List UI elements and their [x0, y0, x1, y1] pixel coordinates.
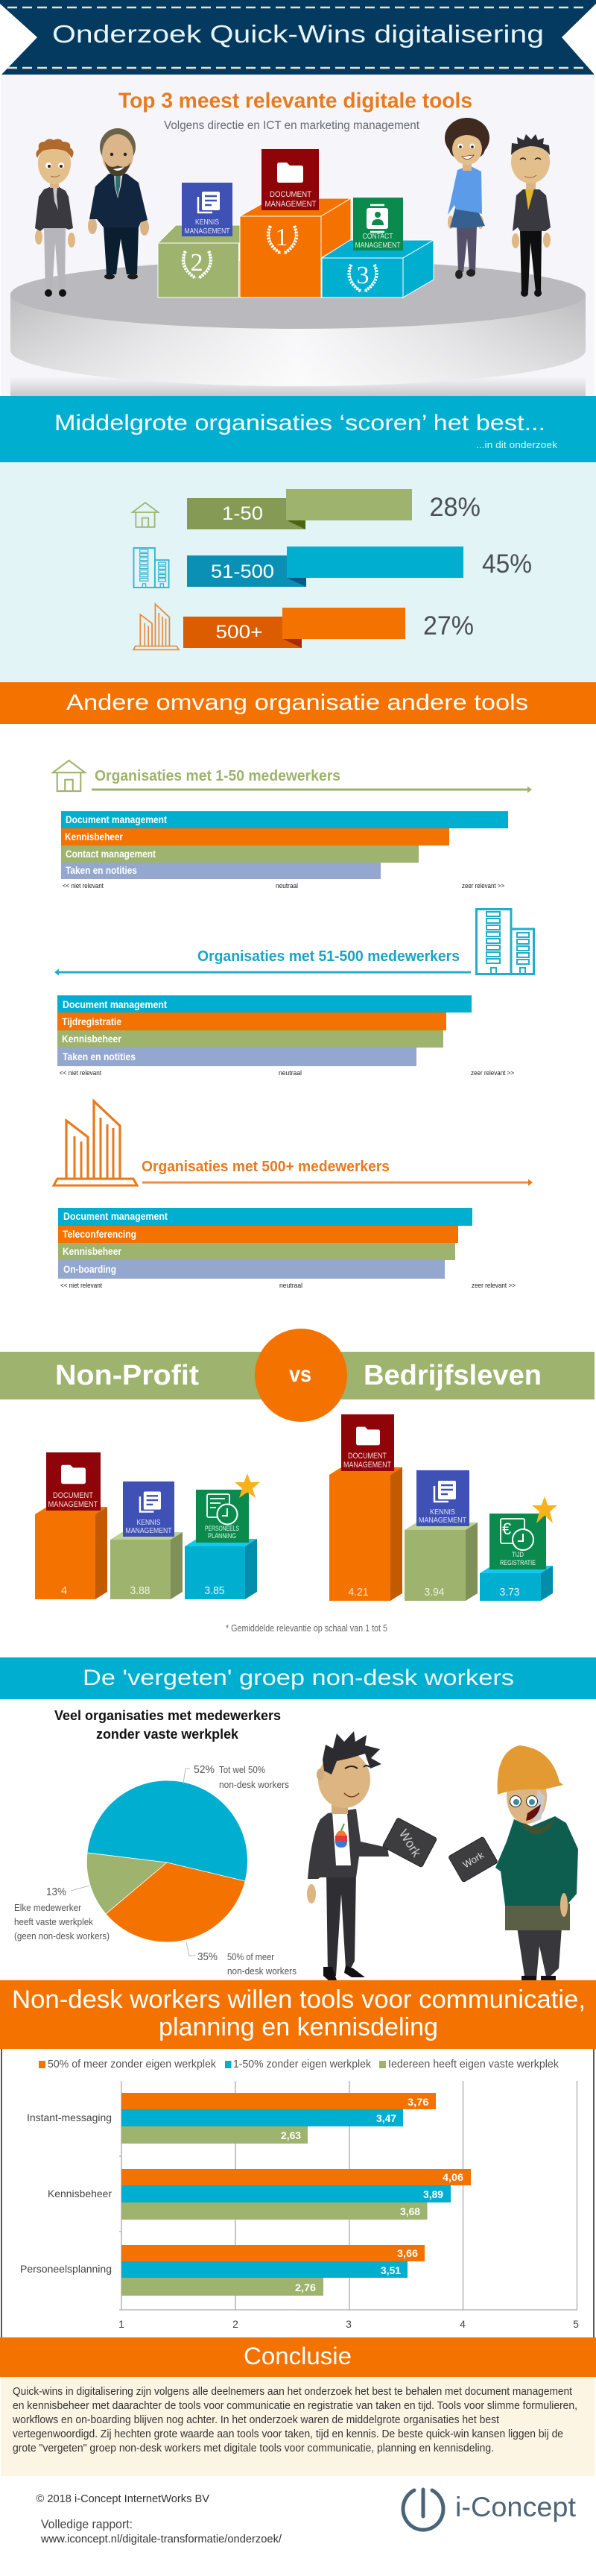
group: kennisbeheer: 4,06 [443, 2171, 463, 2183]
heading: top 3: Top 3 meest relevante digitale tools [118, 89, 472, 113]
bar: document management 4.21: MANAGEMENT [343, 1461, 391, 1470]
label: 52%: Tot wel 50% [219, 1765, 265, 1775]
person: worker with helmet [448, 1745, 578, 1980]
bar: document management 4.21: 4.21 [349, 1586, 368, 1599]
header: non-profit vs bedrijfsleven: vs [289, 1362, 311, 1387]
icon: offices [477, 910, 533, 974]
group: personeelsplanning: 2,76 [295, 2281, 316, 2293]
chart: bedrijfsleven [329, 1414, 557, 1601]
ribbon: 500+ [183, 608, 405, 648]
section: 51-500 medewerkers [54, 910, 533, 1077]
header: vergeten groep: De 'vergeten' groep non-desk workers [83, 1666, 514, 1690]
ribbon: 1-50: 1-50 [222, 503, 263, 524]
legend [39, 2059, 559, 2070]
platform [10, 260, 586, 396]
bar chart: non-desk workers [1, 2049, 594, 2337]
group: kennisbeheer: 3,68 [400, 2205, 420, 2217]
icon: house [53, 760, 85, 791]
bar chart: Taken en notities [66, 864, 137, 876]
group: kennisbeheer: Kennisbeheer [48, 2188, 112, 2199]
group: personeelsplanning [20, 2245, 425, 2296]
panel: conclusie text: Quick-wins in digitalisering zijn volgens alle deelnemers aan het onderzoek het best te behalen met document management [13, 2386, 572, 2398]
bar: kennis management 3.94: MANAGEMENT [419, 1517, 466, 1525]
header: non-desk workers tools: planning en kennisdeling [159, 2013, 438, 2041]
logo: i-Concept: i-Concept [455, 2492, 577, 2522]
person: dark hair man [511, 134, 551, 297]
bar: kennis management 3.94 [405, 1470, 478, 1601]
icon: towers [133, 604, 179, 649]
logo: i-Concept [403, 2490, 577, 2530]
bar chart: Teleconferencing [63, 1228, 136, 1240]
label: 52% [183, 1763, 289, 1790]
header: non-profit vs bedrijfsleven: Non-Profit [55, 1360, 199, 1391]
group: kennisbeheer [48, 2169, 471, 2220]
header: andere omvang [0, 682, 596, 724]
value: 45%: 45% [482, 549, 532, 579]
subheading: Volgens directie en ICT en marketing management [164, 119, 420, 132]
podium [158, 198, 434, 297]
card: contact management: CONTACT [362, 233, 393, 241]
footer: report link [40, 2517, 282, 2545]
bar chart [61, 811, 508, 890]
header: vergeten groep [0, 1657, 596, 1699]
card: contact management: MANAGEMENT [355, 242, 401, 250]
card: document management: DOCUMENT [270, 190, 311, 199]
card: kennis management: KENNIS [195, 218, 219, 227]
card: document management [261, 149, 319, 210]
axis labels: 4 [460, 2318, 466, 2330]
panel: conclusie text [1, 2377, 595, 2476]
chart: non-profit [35, 1452, 260, 1599]
group: personeelsplanning: Personeelsplanning [20, 2263, 112, 2275]
bar chart [58, 1208, 516, 1290]
panel: top 3 tools [1, 75, 595, 396]
panel: size ribbons [0, 462, 596, 682]
bar: tijd registratie 3.73: 3.73 [499, 1586, 520, 1599]
section: 1-50 medewerkers [53, 760, 532, 890]
label: 13%: heeft vaste werkplek [14, 1917, 94, 1927]
label: 52%: non-desk workers [219, 1780, 289, 1790]
panel: conclusie text: en kennisbeheer met daarachter de tools voor communicatie en registratie van taken en tijd. Tools voor slimme formulieren, [13, 2400, 577, 2412]
legend: 1-50% zonder eigen werkplek [233, 2059, 372, 2070]
group: instant-messaging [27, 2093, 436, 2144]
header: conclusie [0, 2337, 596, 2377]
panel: conclusie text: workflows en on-boarding blijven nog achter. In het onderzoek waren de middelgrote organisaties het best [12, 2414, 499, 2426]
footer: report link: www.iconcept.nl/digitale-transformatie/onderzoek/ [40, 2533, 282, 2545]
bar chart: zeer relevant >> [472, 1282, 516, 1290]
heading: Organisaties met 51-500 medewerkers [197, 948, 460, 965]
title: Onderzoek Quick-Wins digitalisering [52, 20, 544, 48]
axis labels: 5 [573, 2318, 579, 2330]
group: personeelsplanning: 3,51 [381, 2264, 401, 2276]
label: 13%: Elke medewerker [14, 1903, 81, 1913]
bar: kennis management 3.88: MANAGEMENT [125, 1527, 171, 1535]
value: 28%: 28% [429, 493, 481, 522]
card: kennis management [182, 183, 232, 236]
pie chart heading: zonder vaste werkplek [96, 1727, 239, 1742]
icon: house [133, 503, 158, 527]
bar chart [57, 995, 514, 1077]
bar: kennis management 3.88 [110, 1481, 183, 1599]
header: middelgrote organisaties: Middelgrote organisaties ‘scoren’ het best... [54, 411, 545, 435]
label: 35% [186, 1942, 297, 1977]
person: bearded man [88, 128, 149, 279]
bar chart: << niet relevant [63, 882, 104, 890]
bar chart: Kennisbeheer [63, 1245, 121, 1257]
bar: kennis management 3.88: KENNIS [137, 1519, 161, 1527]
group: instant-messaging: Instant-messaging [27, 2111, 112, 2123]
bar: kennis management 3.94: 3.94 [425, 1586, 444, 1599]
bar: personeels planning 3.85 [185, 1473, 260, 1599]
header: conclusie: Conclusie [244, 2343, 352, 2369]
icon: tablet [448, 1836, 498, 1883]
bar: document management 4.21: DOCUMENT [348, 1452, 387, 1461]
ribbon: 1-50 [187, 489, 412, 529]
bar: tijd registratie 3.73: € [502, 1520, 511, 1538]
value: 27%: 27% [423, 611, 474, 640]
icon: offices [133, 548, 169, 588]
title banner [0, 0, 596, 75]
bar chart: Document management [63, 998, 167, 1010]
axis labels: 3 [346, 2318, 352, 2330]
bar: kennis management 3.94: KENNIS [430, 1508, 455, 1517]
label: 35%: non-desk workers [227, 1966, 297, 1977]
bar chart: Contact management [66, 848, 156, 860]
pie chart heading: Veel organisaties met medewerkers [54, 1708, 281, 1723]
person: man with tablet [307, 1731, 437, 1981]
label: 13%: 13% [46, 1886, 66, 1898]
bar: tijd registratie 3.73 [480, 1496, 557, 1601]
bar: document management 4 [35, 1452, 107, 1599]
axis labels [118, 2318, 579, 2330]
header: andere omvang: Andere omvang organisatie andere tools [66, 690, 528, 715]
icon: tablet [382, 1818, 437, 1868]
label: 13% [14, 1886, 110, 1942]
bar chart: On-boarding [63, 1263, 116, 1275]
group: instant-messaging: 3,47 [376, 2112, 396, 2124]
pie chart [14, 1763, 297, 1977]
bar chart: << niet relevant [60, 1069, 101, 1077]
bar chart: Tijdregistratie [62, 1015, 121, 1027]
group: instant-messaging: 3,76 [408, 2096, 429, 2108]
label: 35%: 35% [197, 1950, 218, 1963]
group: instant-messaging: 2,63 [281, 2129, 301, 2141]
group: personeelsplanning: 3,66 [397, 2247, 418, 2259]
footer: copyright: © 2018 i-Concept InternetWorks BV [36, 2492, 209, 2505]
label: 13%: (geen non-desk workers) [14, 1931, 110, 1942]
label: 52%: 52% [194, 1763, 215, 1776]
ribbon: 51-500: 51-500 [211, 561, 274, 582]
header: non-desk workers tools [0, 1980, 596, 2049]
bar: tijd registratie 3.73: TIJD [512, 1551, 524, 1559]
panel: conclusie text: grote "vergeten" groep non-desk workers met digitale tools voor communicatie, planning en kennisdeling. [13, 2443, 494, 2454]
header: middelgrote organisaties: ...in dit onderzoek [476, 439, 558, 450]
bar chart: neutraal [276, 882, 298, 890]
icon: tablet: Work [460, 1849, 486, 1870]
header: non-desk workers tools: Non-desk workers willen tools voor communicatie, [12, 1985, 586, 2014]
bar: personeels planning 3.85: 3.85 [204, 1584, 225, 1597]
bar: kennis management 3.88: 3.88 [130, 1584, 150, 1597]
legend: 50% of meer zonder eigen werkplek [48, 2059, 217, 2070]
bar chart: Document management [63, 1210, 168, 1222]
bar chart: Document management [66, 813, 167, 825]
person: curly hair [35, 139, 75, 297]
bar: personeels planning 3.85: PERSONEELS [205, 1525, 239, 1533]
bar: document management 4: MANAGEMENT [48, 1500, 98, 1509]
footnote: * Gemiddelde relevantie op schaal van 1 tot 5 [226, 1622, 387, 1634]
bar: tijd registratie 3.73: REGISTRATIE [500, 1559, 536, 1567]
bar: document management 4: DOCUMENT [53, 1491, 93, 1500]
pie chart heading [54, 1708, 281, 1742]
axis labels: 1 [118, 2318, 124, 2330]
legend: Iedereen heeft eigen vaste werkplek [388, 2059, 559, 2070]
card: contact management [353, 198, 403, 251]
heading: Organisaties met 500+ medewerkers [142, 1159, 390, 1175]
bar: document management 4: 4 [61, 1584, 67, 1597]
bar chart: Kennisbeheer [65, 831, 123, 843]
bar chart: zeer relevant >> [462, 882, 504, 890]
bar chart: zeer relevant >> [471, 1069, 514, 1077]
section: 500+ medewerkers [54, 1101, 533, 1290]
header: middelgrote organisaties [0, 396, 596, 462]
label: 35%: 50% of meer [227, 1952, 274, 1962]
podium: 3 [356, 262, 370, 289]
heading: Organisaties met 1-50 medewerkers [95, 768, 340, 784]
bar chart: Kennisbeheer [62, 1033, 121, 1045]
bar: document management 4.21 [329, 1414, 402, 1601]
bar chart: << niet relevant [60, 1282, 102, 1290]
bar chart: neutraal [279, 1069, 302, 1077]
podium: 2 [191, 249, 203, 277]
bar chart: Taken en notities [63, 1051, 136, 1062]
ribbon: 51-500 [187, 547, 463, 587]
ribbon: 500+: 500+ [216, 622, 262, 643]
header: non-profit vs bedrijfsleven: Bedrijfsleven [364, 1360, 542, 1391]
bar chart: neutraal [279, 1282, 302, 1290]
bar: personeels planning 3.85: PLANNING [208, 1532, 236, 1540]
card: kennis management: MANAGEMENT [185, 227, 229, 236]
panel: conclusie text: vertegenwoordigd. Zij hechten grote waarde aan tools voor taken, tijd en kennis. De beste quick-win kansen liggen bij de [13, 2428, 563, 2440]
footer: report link: Volledige rapport: [41, 2517, 133, 2531]
podium: 1 [276, 224, 288, 251]
card: document management: MANAGEMENT [265, 200, 317, 209]
arrow [92, 786, 532, 793]
person: woman [445, 118, 489, 279]
header: non-profit vs bedrijfsleven [0, 1329, 595, 1422]
axis labels: 2 [232, 2318, 238, 2330]
arrow [142, 1180, 533, 1185]
arrow [54, 969, 471, 975]
group: kennisbeheer: 3,89 [423, 2188, 443, 2200]
icon: tablet: Work [396, 1827, 424, 1859]
icon: towers [54, 1101, 137, 1185]
